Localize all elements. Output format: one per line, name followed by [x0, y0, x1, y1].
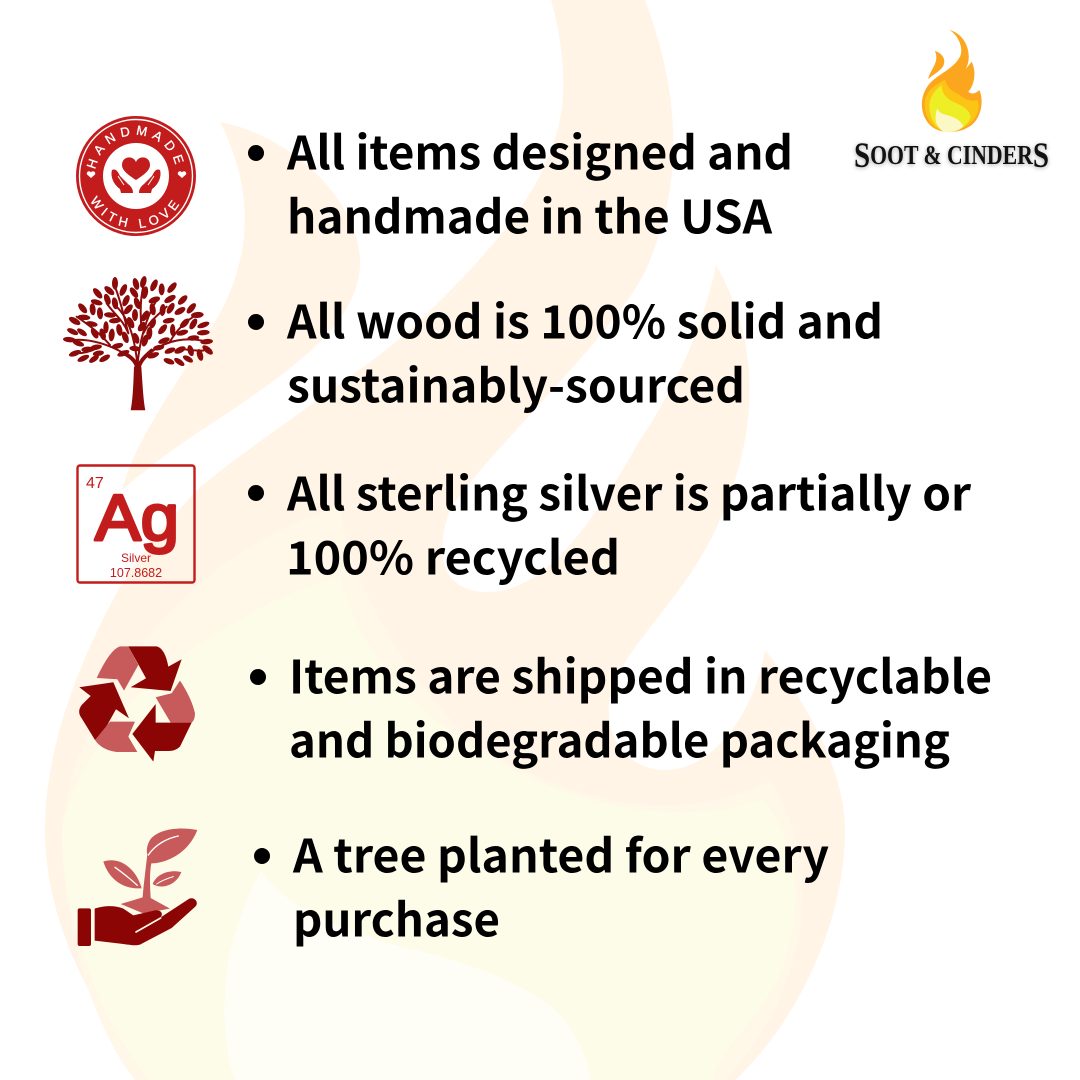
bullet 5: tree planted — [254, 820, 829, 950]
bullet 5: tree planted: A tree planted for every — [292, 820, 829, 886]
bullet 5: tree planted: purchase — [293, 884, 500, 950]
logo: Soot & Cinders — [854, 30, 1049, 175]
bullet 4: recyclable packaging: and biodegradable packaging — [289, 706, 950, 772]
bullet 2: solid sustainable wood: All wood is 100% solid and — [286, 286, 883, 352]
bullet 3: recycled silver — [248, 458, 972, 588]
bullet 4: recyclable packaging: Items are shipped in recyclable — [289, 642, 992, 708]
bullet 1: designed and handmade: handmade in the USA — [287, 182, 773, 248]
icon: hand holding seedling — [78, 828, 197, 946]
icon: silver element tile: Ag — [95, 481, 179, 554]
icon: silver element tile — [78, 466, 194, 582]
icon: handmade with love badge — [76, 116, 196, 236]
bullet 3: recycled silver: All sterling silver is partially or — [286, 458, 972, 524]
background flame — [45, 0, 845, 1080]
bullet 1: designed and handmade: All items designed and — [286, 118, 793, 184]
bullet 4: recyclable packaging — [250, 642, 992, 772]
bullet 2: solid sustainable wood — [248, 286, 883, 416]
icon: tree — [63, 275, 214, 410]
bullet 2: solid sustainable wood: sustainably-sourced — [287, 350, 745, 416]
icon: handmade with love badge: HANDMADE — [86, 126, 184, 169]
icon: silver element tile: 47 — [86, 475, 104, 492]
icon: logo flame — [922, 30, 982, 132]
bullet 1: designed and handmade — [248, 118, 793, 248]
icon: silver element tile: 107.8682 — [110, 566, 162, 580]
bullet 3: recycled silver: 100% recycled — [286, 522, 620, 588]
logo wordmark: OOT & CINDER — [870, 140, 1033, 170]
icon: silver element tile: Silver — [121, 551, 151, 565]
logo wordmark: S — [854, 135, 870, 175]
icon: handmade with love badge: WITH LOVE — [91, 195, 180, 228]
logo wordmark: S — [1033, 135, 1049, 175]
icon: recycle arrows — [79, 646, 195, 762]
